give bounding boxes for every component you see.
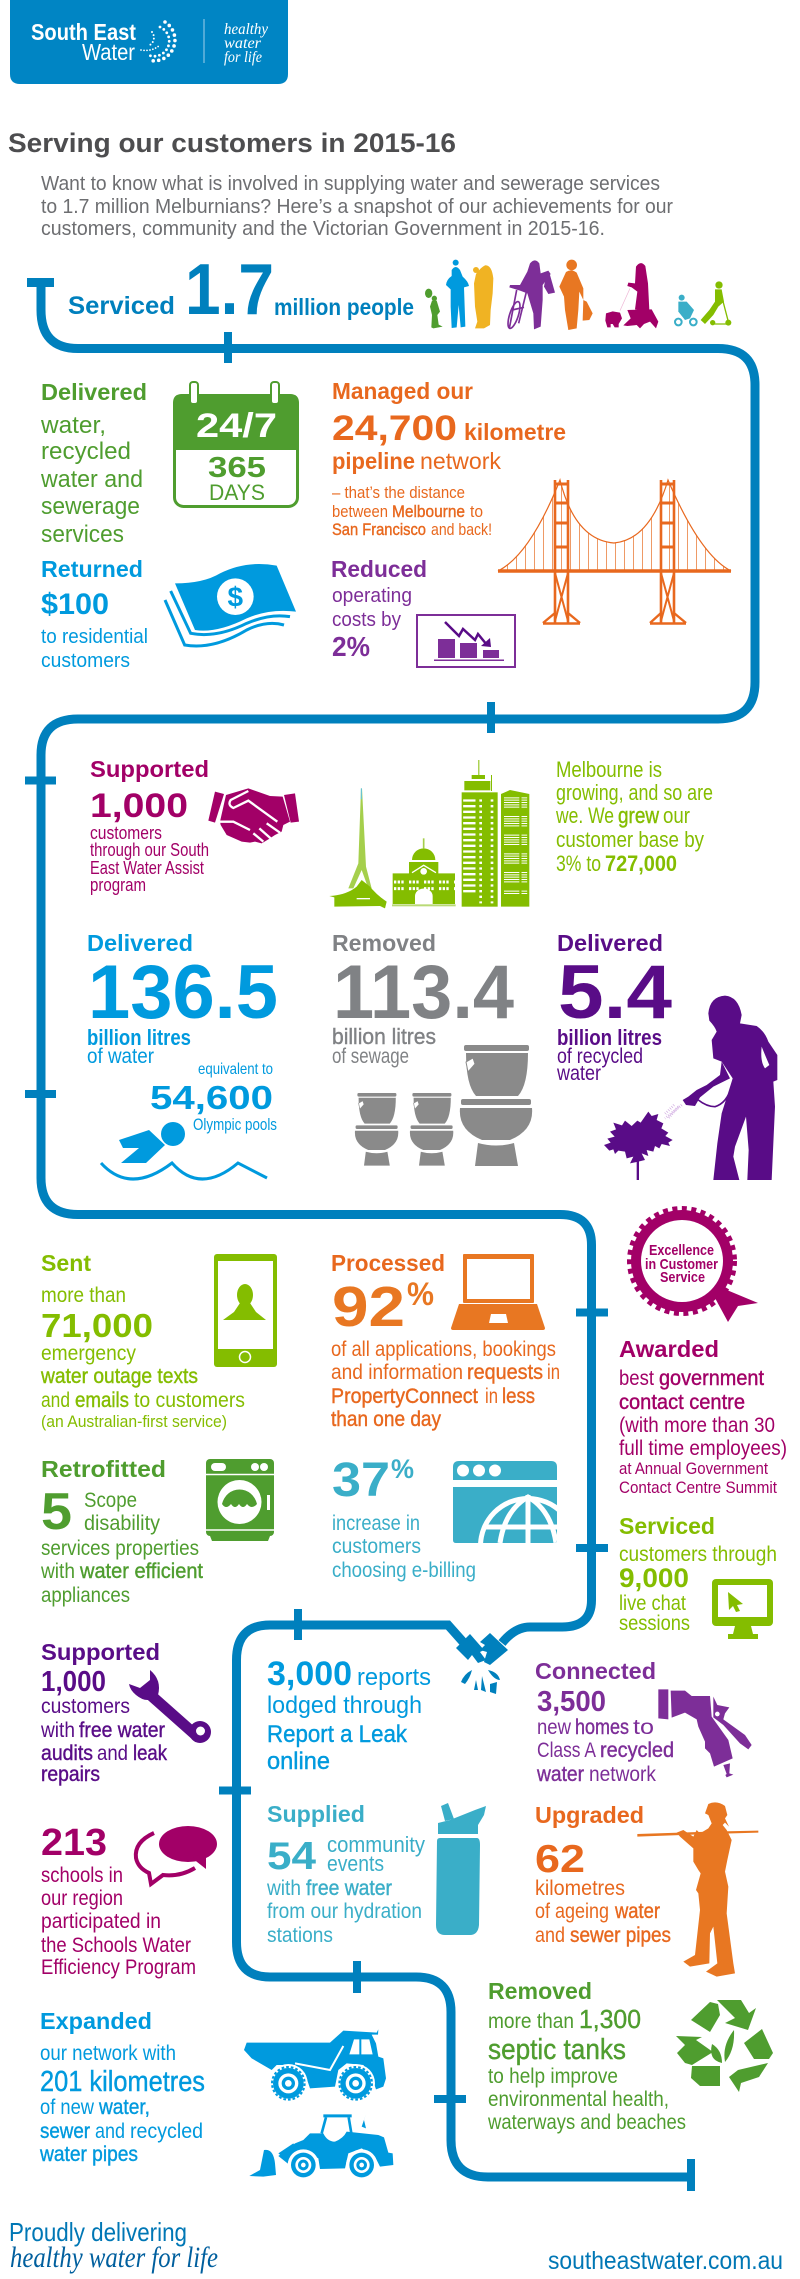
text: melbourne is growing: we. We bbox=[555, 803, 614, 828]
panel: managed pipeline network: 24,700 bbox=[332, 409, 457, 448]
panel: returned $100: customers bbox=[41, 650, 130, 672]
panel: delivered 136.5 billion litres: billion litres bbox=[87, 1025, 191, 1050]
panel: awarded best contact centre: Contact Centre Summit bbox=[619, 1478, 777, 1497]
panel: sent 71,000 texts: and bbox=[41, 1389, 70, 1412]
panel: retrofitted 5 properties: Scope bbox=[84, 1489, 137, 1512]
panel: upgraded 62 kilometres: water bbox=[614, 1900, 660, 1923]
panel: connected 3,500 homes: network bbox=[589, 1763, 656, 1786]
icon: calendar: DAYS bbox=[209, 480, 265, 505]
icon: award rosette: Service bbox=[660, 1269, 705, 1286]
panel: expanded 201 kilometres: of new bbox=[40, 2096, 95, 2119]
logo tagline: water bbox=[224, 35, 262, 52]
water droplets bbox=[461, 1670, 500, 1694]
pipe joints bbox=[25, 282, 691, 2191]
logo wordmark bbox=[31, 19, 136, 65]
panel: supported 1,000 audits: repairs bbox=[41, 1763, 100, 1786]
panel: delivered 136.5 billion litres: 54,600 bbox=[150, 1079, 273, 1116]
panel: managed pipeline network: Melbourne bbox=[392, 502, 465, 521]
panel: supported 1,000 audits: 1,000 bbox=[41, 1666, 106, 1698]
panel: retrofitted 5 properties: appliances bbox=[41, 1584, 130, 1607]
headline: serviced 1.7 million people bbox=[68, 250, 414, 330]
panel: serviced live chat: Serviced bbox=[619, 1513, 715, 1539]
panel: 37% e-billing: % bbox=[391, 1454, 414, 1484]
intro paragraph: Want to know what is involved in supplying water and sewerage services bbox=[41, 173, 660, 195]
panel: expanded 201 kilometres: Expanded bbox=[40, 2008, 152, 2034]
panel: expanded 201 kilometres: sewer bbox=[40, 2120, 90, 2143]
text: melbourne is growing: our bbox=[663, 803, 690, 828]
panel: 3,000 leak reports: Report a Leak bbox=[267, 1721, 408, 1748]
icon: recycling arrows with leaves bbox=[676, 2000, 773, 2092]
footer tagline bbox=[9, 2217, 218, 2274]
panel: awarded best contact centre: Awarded bbox=[619, 1336, 719, 1362]
icon: banknotes bbox=[165, 564, 296, 646]
panel: supplied 54 events: 54 bbox=[267, 1835, 316, 1878]
panel: 3,000 leak reports: reports bbox=[357, 1664, 431, 1691]
panel: retrofitted 5 properties: services properties bbox=[41, 1537, 199, 1560]
panel: supplied 54 events: Supplied bbox=[267, 1801, 365, 1827]
panel: managed pipeline network: between bbox=[332, 502, 388, 521]
panel: expanded 201 kilometres: water pipes bbox=[39, 2143, 138, 2166]
icon: hose nozzle bbox=[658, 1689, 752, 1777]
panel: sent 71,000 texts: more than bbox=[41, 1284, 126, 1307]
panel: sent 71,000 texts: water outage texts bbox=[40, 1365, 198, 1388]
panel: 213 schools bbox=[41, 1822, 217, 1979]
panel: delivered 24/7: services bbox=[41, 521, 124, 548]
panel: delivered 24/7: water, bbox=[40, 412, 106, 439]
panel: supported 1,000 customers: program bbox=[90, 875, 146, 895]
icon: suspension bridge bbox=[498, 480, 731, 624]
panel: supplied 54 events: free water bbox=[306, 1877, 392, 1900]
panel: supplied 54 events: community bbox=[327, 1832, 425, 1857]
panel: supported 1,000 audits: free water bbox=[79, 1719, 165, 1742]
water pipeline bbox=[25, 280, 755, 2191]
panel: processed 92%: less bbox=[502, 1385, 535, 1408]
text: melbourne is growing: customer base by bbox=[556, 827, 704, 852]
panel: delivered 5.4 billion litres: billion litres bbox=[557, 1025, 662, 1050]
panel: returned $100: Returned bbox=[41, 556, 143, 582]
icon: calendar: 24/7 bbox=[196, 407, 277, 445]
panel: processed 92%: than one day bbox=[331, 1408, 441, 1431]
headline: serviced 1.7 million people: Serviced bbox=[68, 292, 175, 320]
panel: removed 1,300 septic tanks: 1,300 bbox=[579, 2004, 641, 2034]
panel: supported 1,000 audits: leak bbox=[133, 1742, 167, 1765]
panel: awarded best contact centre: contact centre bbox=[619, 1391, 745, 1414]
icon: dump truck bbox=[244, 2029, 386, 2103]
logo wordmark: Water bbox=[82, 39, 135, 65]
panel: serviced live chat: sessions bbox=[619, 1612, 690, 1635]
panel: supported 1,000 audits: customers bbox=[41, 1695, 130, 1718]
panel: removed 1,300 septic tanks: more than bbox=[488, 2010, 574, 2033]
panel: sent 71,000 texts bbox=[40, 1250, 277, 1431]
panel: expanded 201 kilometres: recycled bbox=[130, 2120, 203, 2143]
panel: supplied 54 events bbox=[266, 1801, 486, 1947]
panel: sent 71,000 texts: emergency bbox=[41, 1342, 136, 1365]
panel: delivered 24/7 bbox=[40, 379, 299, 548]
panel: delivered 24/7: water and bbox=[40, 466, 143, 493]
panel: reduced operating costs: operating bbox=[332, 585, 412, 607]
text: melbourne is growing: 3% to bbox=[556, 851, 601, 876]
icon: water bottle bbox=[436, 1803, 486, 1935]
intro paragraph: customers, community and the Victorian Government in 2015-16. bbox=[41, 218, 605, 240]
panel: supported 1,000 audits: Supported bbox=[41, 1639, 160, 1665]
panel: removed 113.4 billion litres bbox=[332, 930, 532, 1166]
text: melbourne is growing: grew bbox=[618, 803, 659, 828]
panel: reduced operating costs bbox=[331, 556, 515, 667]
panel: upgraded 62 kilometres bbox=[535, 1802, 758, 1977]
panel: processed 92%: requests bbox=[467, 1361, 543, 1384]
headline: serviced 1.7 million people: million people bbox=[274, 294, 414, 320]
panel: connected 3,500 homes: Connected bbox=[535, 1658, 656, 1684]
panel: removed 1,300 septic tanks: Removed bbox=[488, 1978, 592, 2004]
panel: connected 3,500 homes: recycled bbox=[600, 1739, 674, 1762]
panel: 213 schools: schools in bbox=[41, 1864, 123, 1887]
panel: retrofitted 5 properties bbox=[40, 1456, 274, 1607]
panel: supported 1,000 audits: and bbox=[97, 1742, 128, 1765]
panel: 213 schools: 213 bbox=[41, 1822, 107, 1864]
small toilet right bbox=[410, 1093, 453, 1166]
panel: removed 1,300 septic tanks bbox=[487, 1978, 773, 2134]
panel: sent 71,000 texts: 71,000 bbox=[41, 1307, 153, 1344]
panel: managed pipeline network: pipeline bbox=[332, 448, 415, 474]
panel: 37% e-billing bbox=[332, 1459, 557, 1582]
panel: 3,000 leak reports: 3,000 bbox=[267, 1655, 352, 1693]
footer tagline: healthy water for life bbox=[10, 2241, 218, 2274]
panel: serviced live chat: customers through bbox=[619, 1543, 777, 1566]
logo wordmark: South East bbox=[31, 19, 136, 45]
logo tagline bbox=[224, 21, 269, 66]
icon: woman watering tree bbox=[604, 996, 777, 1180]
text: melbourne is growing: 727,000 bbox=[605, 851, 677, 876]
panel: upgraded 62 kilometres: kilometres bbox=[535, 1877, 625, 1900]
panel: 37% e-billing: customers bbox=[332, 1535, 421, 1558]
panel: reduced operating costs: 2% bbox=[332, 631, 370, 662]
panel: delivered 5.4 billion litres: 5.4 bbox=[558, 950, 672, 1035]
icon: front loader bbox=[249, 2114, 393, 2181]
panel: delivered 136.5 billion litres: 136.5 bbox=[88, 950, 278, 1035]
panel: retrofitted 5 properties: Retrofitted bbox=[41, 1456, 166, 1482]
panel: removed 113.4 billion litres: billion litres bbox=[332, 1024, 436, 1049]
panel: awarded best contact centre: at Annual Government bbox=[619, 1459, 768, 1478]
panel: delivered 5.4 billion litres bbox=[556, 930, 777, 1180]
panel: 37% e-billing: 37 bbox=[332, 1454, 390, 1507]
panel: supported 1,000 audits: audits bbox=[41, 1742, 93, 1765]
panel: managed pipeline network: – that’s the distance bbox=[332, 483, 465, 502]
panel: 213 schools: participated in bbox=[41, 1910, 161, 1933]
icon: falling bar chart bbox=[417, 615, 515, 667]
panel: 213 schools: our region bbox=[41, 1887, 123, 1910]
panel: retrofitted 5 properties: water efficient bbox=[79, 1560, 203, 1583]
panel: 213 schools: the Schools Water bbox=[41, 1934, 191, 1957]
panel: managed pipeline network: Managed our bbox=[332, 378, 473, 404]
panel: 3,000 leak reports bbox=[267, 1655, 431, 1775]
panel: delivered 24/7: Delivered bbox=[41, 379, 147, 405]
panel: awarded best contact centre: (with more than 30 bbox=[619, 1414, 775, 1437]
panel: upgraded 62 kilometres: and bbox=[535, 1924, 565, 1947]
intro paragraph: to 1.7 million Melburnians? Here’s a snapshot of our achievements for our bbox=[41, 196, 673, 218]
icon: toilets bbox=[355, 1045, 532, 1166]
panel: processed 92%: PropertyConnect bbox=[331, 1385, 478, 1408]
panel: upgraded 62 kilometres: of ageing bbox=[535, 1900, 609, 1923]
intro paragraph bbox=[41, 173, 673, 240]
panel: processed 92%: % bbox=[407, 1276, 434, 1312]
icon: computer monitor bbox=[712, 1579, 773, 1639]
panel: managed pipeline network: network bbox=[420, 448, 501, 474]
panel: supplied 54 events: from our hydration bbox=[267, 1900, 422, 1923]
panel: delivered 24/7: recycled bbox=[41, 438, 131, 465]
panel: processed 92%: and information bbox=[331, 1361, 463, 1384]
panel: delivered 136.5 billion litres: Olympic pools bbox=[193, 1115, 277, 1134]
panel: delivered 136.5 billion litres bbox=[87, 930, 278, 1179]
icon: melbourne skyline bbox=[329, 760, 529, 908]
panel: sent 71,000 texts: (an Australian-first service) bbox=[41, 1412, 227, 1431]
panel: awarded best contact centre: best bbox=[619, 1367, 654, 1390]
icon: people silhouettes bbox=[425, 260, 731, 330]
icon: speech bubbles bbox=[136, 1826, 217, 1884]
panel: 213 schools: Efficiency Program bbox=[41, 1956, 196, 1979]
panel: supplied 54 events: events bbox=[327, 1851, 384, 1876]
panel: reduced operating costs: Reduced bbox=[331, 556, 427, 582]
icon: laptop bbox=[451, 1254, 545, 1330]
panel: processed 92%: 92 bbox=[332, 1275, 405, 1339]
panel: upgraded 62 kilometres: sewer pipes bbox=[570, 1924, 671, 1947]
panel: managed pipeline network bbox=[332, 378, 566, 539]
panel: retrofitted 5 properties: disability bbox=[84, 1512, 160, 1535]
panel: processed 92%: Processed bbox=[331, 1250, 445, 1276]
panel: supported 1,000 customers: Supported bbox=[90, 756, 209, 782]
panel: serviced live chat: live chat bbox=[619, 1592, 686, 1615]
panel: supplied 54 events: with bbox=[266, 1877, 301, 1900]
icon: leaking pipe joint bbox=[456, 1633, 508, 1694]
text: melbourne is growing bbox=[555, 757, 713, 876]
panel: connected 3,500 homes: new bbox=[537, 1716, 572, 1739]
headline: serviced 1.7 million people: 1.7 bbox=[185, 250, 274, 330]
panel: processed 92% bbox=[331, 1250, 560, 1431]
panel: supported 1,000 customers: through our South bbox=[90, 840, 209, 860]
panel: upgraded 62 kilometres: Upgraded bbox=[535, 1802, 644, 1828]
panel: removed 1,300 septic tanks: septic tanks bbox=[488, 2034, 626, 2066]
logo bbox=[10, 0, 288, 84]
panel: delivered 136.5 billion litres: Delivered bbox=[87, 930, 193, 956]
footer website: southeastwater.com.au bbox=[548, 2247, 783, 2275]
panel: removed 113.4 billion litres: Removed bbox=[332, 930, 436, 956]
panel: serviced live chat bbox=[619, 1513, 777, 1639]
panel: 3,000 leak reports: online bbox=[267, 1748, 330, 1775]
panel: sent 71,000 texts: to customers bbox=[134, 1389, 245, 1412]
panel: supplied 54 events: stations bbox=[267, 1924, 333, 1947]
panel: upgraded 62 kilometres: 62 bbox=[535, 1838, 585, 1881]
arts centre spire bbox=[329, 788, 387, 908]
panel: 37% e-billing: increase in bbox=[332, 1512, 420, 1535]
panel: managed pipeline network: San Francisco bbox=[332, 520, 426, 539]
panel: reduced operating costs: costs by bbox=[332, 609, 401, 631]
panel: managed pipeline network: and back! bbox=[431, 520, 492, 539]
large toilet bbox=[460, 1045, 532, 1166]
panel: expanded 201 kilometres: our network with bbox=[40, 2042, 176, 2065]
panel: returned $100: to residential bbox=[41, 626, 148, 648]
panel: removed 1,300 septic tanks: environmental health, bbox=[488, 2088, 669, 2111]
panel: supported 1,000 customers: 1,000 bbox=[90, 787, 188, 825]
panel: retrofitted 5 properties: 5 bbox=[41, 1483, 72, 1541]
icon: award rosette: in Customer bbox=[645, 1256, 718, 1273]
panel: sent 71,000 texts: emails bbox=[75, 1389, 129, 1412]
panel: removed 1,300 septic tanks: to help improve bbox=[488, 2065, 618, 2088]
panel: delivered 5.4 billion litres: of recycled bbox=[557, 1045, 643, 1068]
panel: retrofitted 5 properties: with bbox=[40, 1560, 75, 1583]
small toilet left bbox=[355, 1093, 398, 1166]
logo tagline: for life bbox=[224, 49, 262, 66]
icon: mobile phone bbox=[214, 1254, 277, 1367]
panel: expanded 201 kilometres: and bbox=[95, 2120, 125, 2143]
panel: connected 3,500 homes: 3,500 bbox=[537, 1686, 606, 1718]
icon: calendar bbox=[173, 382, 299, 506]
title: Serving our customers in 2015-16 bbox=[8, 128, 456, 158]
panel: delivered 136.5 billion litres: equivalent to bbox=[198, 1061, 273, 1078]
panel: delivered 5.4 billion litres: water bbox=[556, 1062, 601, 1085]
panel: connected 3,500 homes: homes bbox=[575, 1716, 629, 1739]
icon: browser window with globe bbox=[453, 1461, 557, 1543]
logo tagline: healthy bbox=[224, 21, 269, 38]
icon: award rosette bbox=[630, 1208, 758, 1322]
panel: connected 3,500 homes: Class A bbox=[537, 1739, 596, 1762]
panel: supported 1,000 customers: customers bbox=[90, 823, 162, 843]
text: melbourne is growing: Melbourne is bbox=[556, 757, 662, 782]
icon: banknotes: $ bbox=[228, 581, 244, 612]
panel: awarded best contact centre bbox=[619, 1208, 787, 1497]
panel: managed pipeline network: to bbox=[470, 502, 483, 521]
icon: calendar: 365 bbox=[208, 452, 266, 484]
panel: removed 1,300 septic tanks: waterways and beaches bbox=[487, 2111, 686, 2134]
panel: expanded 201 kilometres: 201 kilometres bbox=[40, 2066, 205, 2098]
panel: expanded 201 kilometres: water, bbox=[98, 2096, 150, 2119]
panel: supported 1,000 customers: East Water Assist bbox=[90, 858, 204, 878]
flinders street station bbox=[392, 838, 456, 906]
panel: removed 113.4 billion litres: of sewage bbox=[332, 1045, 409, 1068]
panel: 37% e-billing: choosing e-billing bbox=[332, 1559, 476, 1582]
panel: supported 1,000 audits bbox=[40, 1639, 211, 1786]
panel: expanded 201 kilometres bbox=[39, 2008, 393, 2181]
panel: removed 113.4 billion litres: 113.4 bbox=[333, 950, 514, 1035]
panel: processed 92%: in bbox=[547, 1361, 560, 1384]
panel: connected 3,500 homes: to bbox=[633, 1716, 654, 1739]
panel: awarded best contact centre: government bbox=[659, 1367, 764, 1390]
panel: supported 1,000 customers bbox=[90, 756, 299, 895]
panel: processed 92%: of all applications, bookings bbox=[331, 1338, 556, 1361]
panel: connected 3,500 homes: water bbox=[536, 1763, 584, 1786]
panel: supported 1,000 audits: with bbox=[40, 1719, 75, 1742]
icon: worker carrying pipe bbox=[637, 1802, 758, 1977]
panel: serviced live chat: 9,000 bbox=[619, 1563, 689, 1593]
icon: handshake bbox=[208, 788, 299, 843]
icon: wrench bbox=[129, 1670, 211, 1743]
office towers bbox=[462, 760, 529, 907]
panel: returned $100: $100 bbox=[41, 588, 109, 621]
icon: washing machine bbox=[206, 1459, 274, 1541]
panel: managed pipeline network: kilometre bbox=[464, 419, 566, 445]
panel: processed 92%: in bbox=[485, 1385, 498, 1408]
panel: 3,000 leak reports: lodged through bbox=[267, 1692, 422, 1719]
panel: sent 71,000 texts: Sent bbox=[41, 1250, 91, 1276]
text: melbourne is growing: growing, and so are bbox=[556, 780, 713, 805]
panel: delivered 136.5 billion litres: of water bbox=[87, 1045, 154, 1068]
panel: delivered 5.4 billion litres: Delivered bbox=[557, 930, 663, 956]
icon: swimmer bbox=[101, 1122, 267, 1179]
panel: connected 3,500 homes bbox=[535, 1658, 752, 1786]
panel: delivered 24/7: sewerage bbox=[41, 493, 140, 520]
footer tagline: Proudly delivering bbox=[9, 2217, 187, 2247]
logo water swirl dots bbox=[141, 22, 175, 61]
panel: returned $100 bbox=[41, 556, 296, 672]
icon: award rosette: Excellence bbox=[649, 1242, 714, 1259]
